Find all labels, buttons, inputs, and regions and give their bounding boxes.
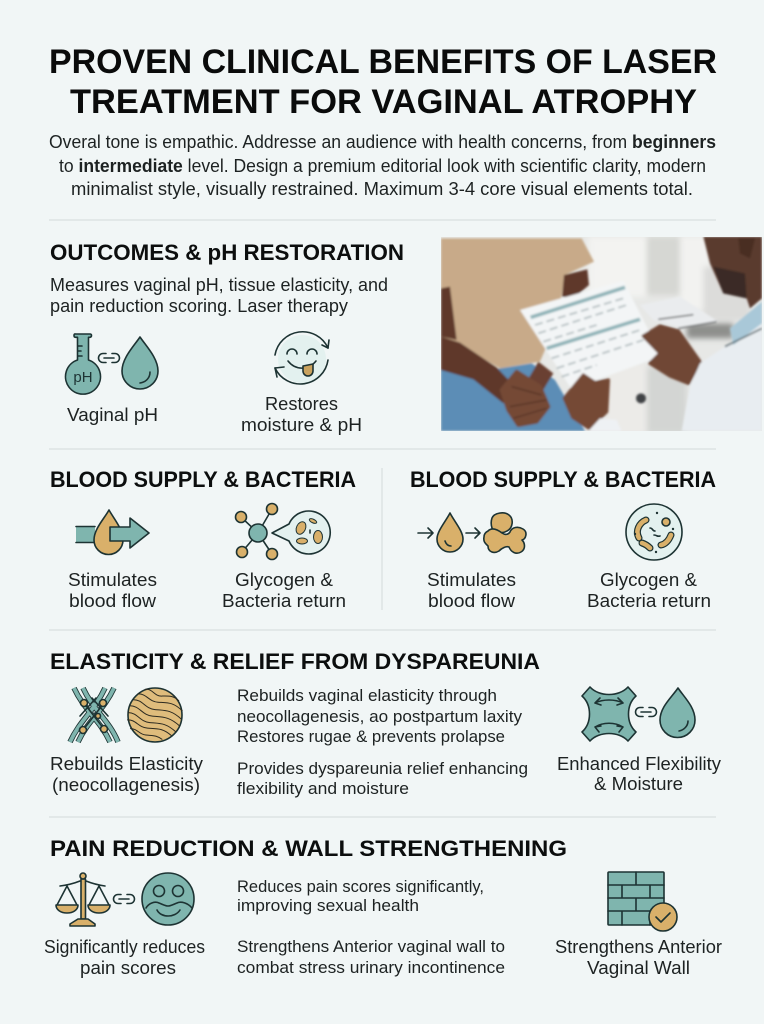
text block: dyspareunia relief	[237, 759, 528, 798]
label: significantly reduces pain scores	[44, 936, 205, 978]
icon: collagen fibres	[70, 688, 118, 742]
text block: rebuilds vaginal elasticity: Rebuilds vaginal elasticity through	[237, 686, 497, 705]
icon: arrows, drop and clot	[418, 513, 526, 553]
label: strengthens anterior vaginal wall: Strengthens Anterior	[555, 936, 722, 957]
title: TREATMENT FOR VAGINAL ATROPHY	[70, 83, 697, 121]
label: glycogen and bacteria return left: Glycogen &	[235, 569, 334, 590]
label: glycogen and bacteria return left	[222, 569, 346, 611]
label: rebuilds elasticity	[50, 753, 204, 795]
text block: dyspareunia relief: flexibility and moisture	[237, 779, 409, 798]
label: enhanced flexibility and moisture: Enhanced Flexibility	[557, 753, 722, 774]
text block: strengthens anterior wall: Strengthens Anterior vaginal wall to	[237, 937, 505, 956]
icon: brick wall with check badge	[608, 872, 677, 931]
icon: pH flask linked to water drop	[66, 334, 158, 394]
heading: elasticity: ELASTICITY & RELIEF FROM DYSPAREUNIA	[50, 649, 540, 674]
label: glycogen and bacteria return right	[587, 569, 711, 611]
intro text block: minimalist style, visually restrained. Maximum 3-4 core visual elements total.	[71, 179, 693, 199]
title	[49, 43, 717, 121]
label: stimulates blood flow left: blood flow	[69, 590, 157, 611]
label: restores moisture and pH	[241, 393, 362, 435]
text block: reduces pain scores	[237, 877, 484, 915]
panel: blood supply and bacteria, left	[50, 467, 356, 611]
text block: reduces pain scores: improving sexual health	[237, 896, 419, 915]
label: significantly reduces pain scores: pain scores	[80, 957, 176, 978]
panel: elasticity and relief	[50, 649, 722, 798]
intro text block: Overal tone is empathic. Addresse an audience with health concerns, from beginners	[49, 132, 716, 152]
panel: pain reduction and wall strengthening	[44, 836, 722, 978]
label: rebuilds elasticity: (neocollagenesis)	[52, 774, 200, 795]
heading: blood supply right: BLOOD SUPPLY & BACTERIA	[410, 467, 716, 492]
label: stimulates blood flow left: Stimulates	[68, 569, 157, 590]
label: enhanced flexibility and moisture	[557, 753, 722, 794]
text block: rebuilds vaginal elasticity	[237, 686, 522, 746]
panel: blood supply and bacteria, right	[410, 467, 716, 611]
label: stimulates blood flow right: Stimulates	[427, 569, 516, 590]
title: PROVEN CLINICAL BENEFITS OF LASER	[49, 43, 717, 81]
label: stimulates blood flow left	[68, 569, 157, 611]
icon: smiling face with restore arrows	[275, 332, 329, 384]
icon: molecule and bacteria bubble	[236, 504, 330, 560]
text block: rebuilds vaginal elasticity: neocollagenesis, ao postpartum laxity	[237, 707, 522, 726]
text block: measures	[50, 275, 388, 316]
label: strengthens anterior vaginal wall	[555, 936, 722, 978]
label: stimulates blood flow right: blood flow	[428, 590, 516, 611]
text block: reduces pain scores: Reduces pain scores significantly,	[237, 877, 484, 896]
label: significantly reduces pain scores: Significantly reduces	[44, 936, 205, 957]
text block: measures: pain reduction scoring. Laser therapy	[50, 296, 348, 316]
label: strengthens anterior vaginal wall: Vaginal Wall	[587, 957, 690, 978]
text block: strengthens anterior wall	[237, 937, 505, 977]
text block: dyspareunia relief: Provides dyspareunia relief enhancing	[237, 759, 528, 778]
icon: scales linked to smiling face	[56, 873, 194, 926]
intro text block: to intermediate level. Design a premium editorial look with scientific clarity, modern	[59, 156, 706, 176]
photo: doctor reviewing chart with patient	[441, 237, 762, 433]
icon: wavy tissue disc	[122, 683, 189, 746]
label: glycogen and bacteria return left: Bacteria return	[222, 590, 346, 611]
label: restores moisture and pH: Restores	[265, 393, 338, 414]
text block: measures: Measures vaginal pH, tissue elasticity, and	[50, 275, 388, 295]
panel: outcomes and pH restoration	[50, 240, 404, 435]
intro text block	[49, 132, 716, 199]
label: vaginal pH: Vaginal pH	[67, 404, 158, 425]
icon: blood drop with flow arrow	[76, 510, 149, 554]
text block: rebuilds vaginal elasticity: Restores rugae & prevents prolapse	[237, 727, 505, 746]
icon: petri dish with bacteria	[626, 504, 682, 560]
label: rebuilds elasticity: Rebuilds Elasticity	[50, 753, 204, 774]
text block: strengthens anterior wall: combat stress urinary incontinence	[237, 958, 505, 977]
label: glycogen and bacteria return right: Glycogen &	[600, 569, 698, 590]
heading: blood supply left: BLOOD SUPPLY & BACTERIA	[50, 467, 356, 492]
label: glycogen and bacteria return right: Bacteria return	[587, 590, 711, 611]
icon: flexible tissue linked to drop	[582, 687, 695, 741]
label: stimulates blood flow right	[427, 569, 516, 611]
label: enhanced flexibility and moisture: & Moisture	[594, 773, 683, 794]
heading: outcomes: OUTCOMES & pH RESTORATION	[50, 240, 404, 265]
icon: pH flask linked to water drop: pH	[73, 369, 93, 386]
heading: pain reduction: PAIN REDUCTION & WALL STRENGTHENING	[50, 836, 567, 861]
label: restores moisture and pH: moisture & pH	[241, 414, 362, 435]
